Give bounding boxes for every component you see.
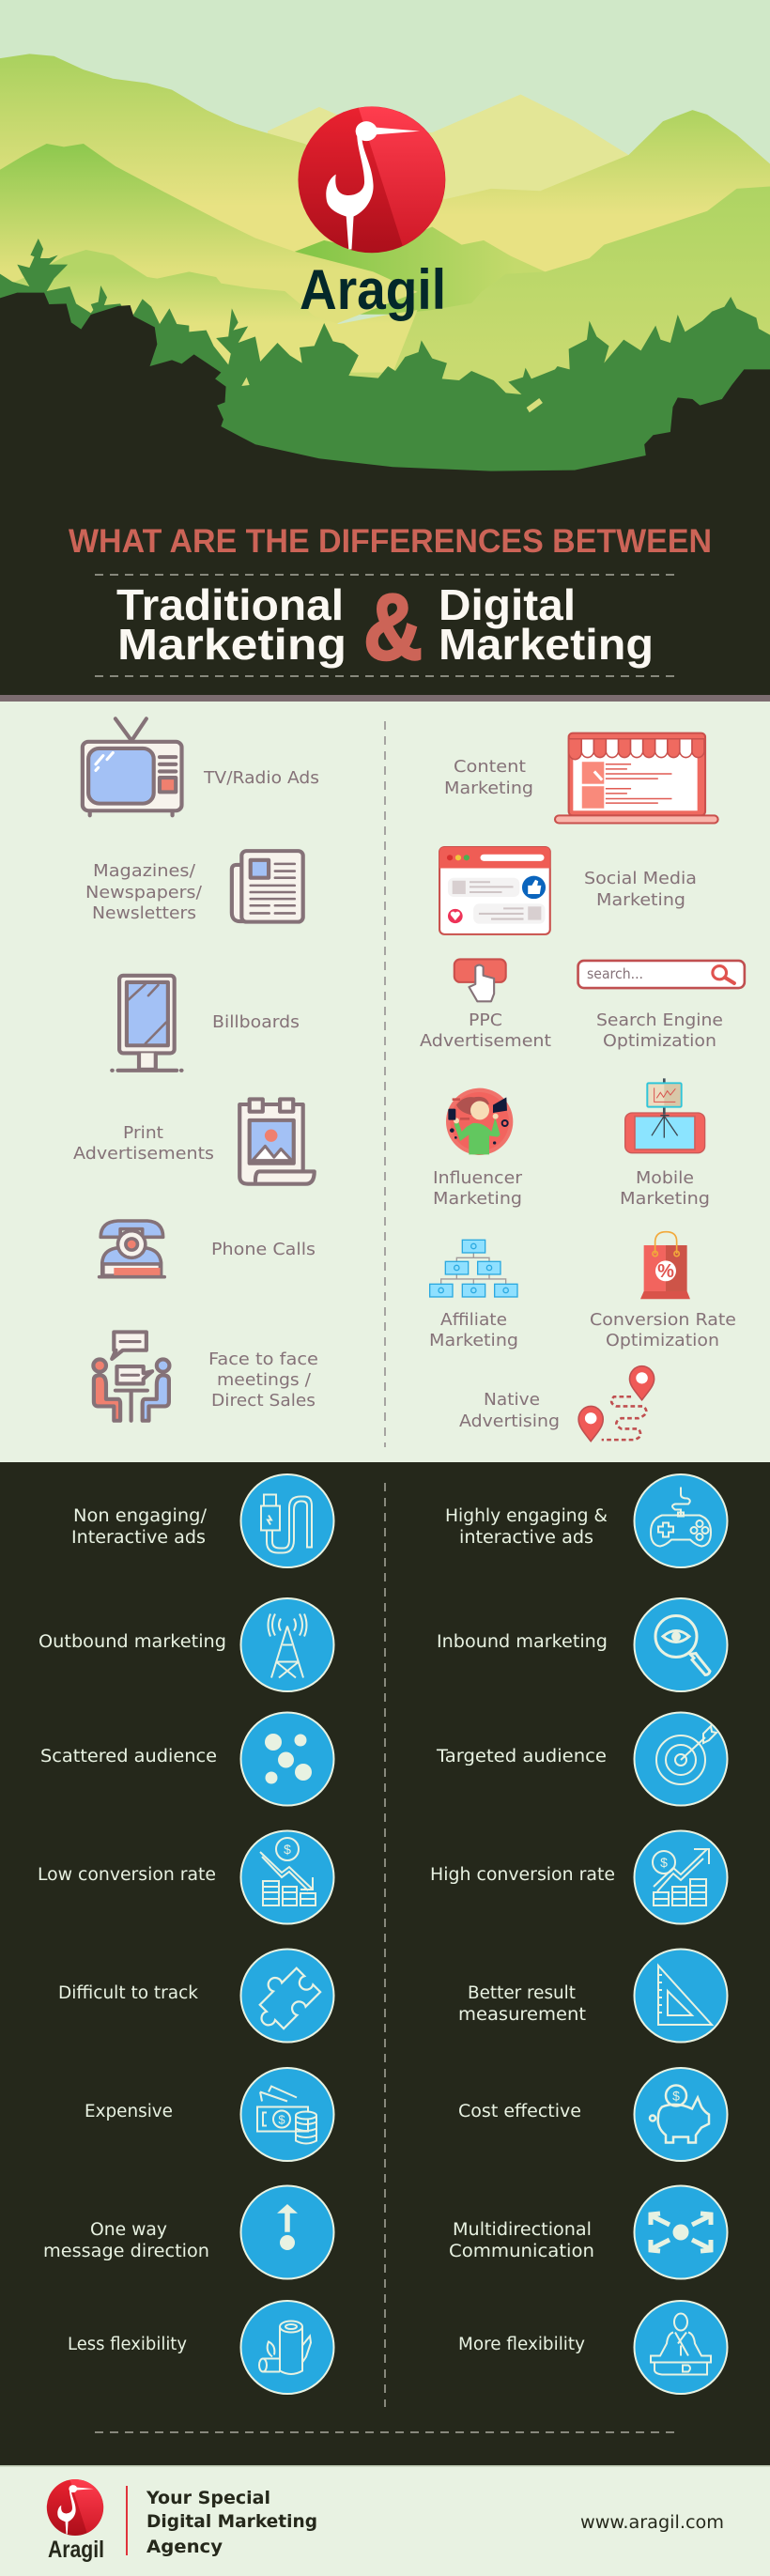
label: More flexibility bbox=[458, 2335, 585, 2354]
label: Advertising bbox=[459, 1412, 560, 1431]
icon: print poster bbox=[239, 1099, 315, 1184]
icon: meeting bbox=[93, 1332, 169, 1421]
icon: antenna tower bbox=[240, 1598, 334, 1691]
icon: click button bbox=[454, 959, 506, 1001]
label bbox=[449, 2220, 594, 2261]
label: Communication bbox=[449, 2242, 594, 2261]
panel: comparison bbox=[0, 1462, 770, 2465]
label: measurement bbox=[458, 2005, 586, 2025]
item: Magazines bbox=[85, 851, 303, 923]
icon: rotary phone bbox=[100, 1221, 164, 1277]
footer wordmark: Aragil bbox=[48, 2537, 104, 2563]
icon: map pins and route bbox=[578, 1366, 654, 1442]
label bbox=[433, 1169, 523, 1209]
label bbox=[85, 862, 202, 923]
label: Optimization bbox=[606, 1332, 719, 1350]
heading: what are the differences: WHAT ARE THE DIFFERENCES BETWEEN bbox=[69, 523, 712, 560]
header landscape bbox=[0, 0, 770, 563]
label: Marketing bbox=[433, 1190, 522, 1209]
label: Advertisements bbox=[73, 1145, 214, 1164]
title: traditional marketing and digital marketing: Traditional bbox=[116, 580, 344, 629]
icon: multidirectional arrows bbox=[635, 2186, 727, 2278]
label: Phone Calls bbox=[211, 1241, 316, 1259]
website: www.aragil.com bbox=[580, 2513, 724, 2533]
label: Scattered audience bbox=[40, 1747, 217, 1766]
label: Less flexibility bbox=[68, 2335, 187, 2354]
item: Content Marketing bbox=[444, 733, 718, 824]
label: Outbound marketing bbox=[38, 1632, 226, 1652]
label: Billboards bbox=[212, 1013, 300, 1032]
label bbox=[429, 1311, 518, 1350]
label: Conversion Rate bbox=[590, 1311, 736, 1330]
label: Magazines/ bbox=[93, 862, 195, 881]
item: Affiliate Marketing bbox=[429, 1240, 518, 1350]
label: Newspapers/ bbox=[85, 884, 202, 902]
label: Marketing bbox=[429, 1332, 518, 1350]
icon: rising money chart bbox=[635, 1831, 727, 1923]
icon: cash and coins bbox=[240, 2068, 334, 2161]
search placeholder: search... bbox=[587, 965, 643, 982]
label: Native bbox=[484, 1391, 540, 1410]
icon: television bbox=[83, 718, 182, 815]
label: Direct Sales bbox=[211, 1392, 316, 1411]
icon: logs bbox=[240, 2301, 334, 2394]
label: message direction bbox=[43, 2242, 209, 2261]
label: Low conversion rate bbox=[38, 1865, 216, 1885]
label: TV/Radio Ads bbox=[203, 769, 319, 788]
icon: falling money chart bbox=[240, 1831, 334, 1923]
icon: scattered dots bbox=[240, 1713, 334, 1805]
label: Inbound marketing bbox=[437, 1632, 608, 1652]
label: interactive ads bbox=[459, 1528, 593, 1548]
row: one way vs multidirectional bbox=[43, 2186, 727, 2278]
item: Mobile Marketing bbox=[620, 1078, 710, 1209]
label: Interactive ads bbox=[71, 1528, 206, 1548]
percent sign: % bbox=[657, 1261, 674, 1282]
icon: shopping bag bbox=[640, 1232, 690, 1299]
title: traditional marketing and digital marketing bbox=[116, 575, 654, 680]
item: Billboards bbox=[112, 976, 300, 1071]
title: traditional marketing and digital marketing: Digital bbox=[439, 580, 576, 629]
label bbox=[444, 758, 533, 798]
footer logo bbox=[47, 2479, 103, 2536]
label: Search Engine bbox=[596, 1011, 723, 1030]
icon: meditating person bbox=[635, 2301, 727, 2394]
item: Phone Calls bbox=[100, 1221, 316, 1277]
icon: billboard bbox=[112, 976, 182, 1071]
icon: piggy bank: $ bbox=[672, 2089, 680, 2104]
label: Targeted audience bbox=[436, 1747, 607, 1766]
icon: laptop storefront bbox=[555, 733, 718, 824]
label bbox=[208, 1350, 318, 1411]
row: low vs high conversion bbox=[38, 1831, 727, 1923]
icon: influencer bbox=[446, 1088, 513, 1155]
icon: cable bbox=[240, 1474, 334, 1567]
icon: falling money chart: $ bbox=[284, 1842, 291, 1857]
icon: search box bbox=[578, 961, 745, 988]
label: One way bbox=[90, 2220, 167, 2240]
label: Better result bbox=[468, 1983, 576, 2003]
label: High conversion rate bbox=[430, 1865, 615, 1885]
icon: newspaper bbox=[232, 851, 303, 922]
label: Marketing bbox=[444, 779, 533, 798]
item: Social Media Marketing bbox=[439, 847, 697, 934]
label: Influencer bbox=[433, 1169, 523, 1188]
label: Affiliate bbox=[440, 1311, 507, 1330]
label bbox=[420, 1011, 551, 1051]
label: PPC bbox=[469, 1011, 502, 1030]
row: non engaging vs highly engaging bbox=[71, 1474, 727, 1567]
divider stripe bbox=[0, 695, 770, 702]
icon: puzzle piece bbox=[240, 1950, 334, 2042]
label bbox=[73, 1124, 214, 1164]
label: Highly engaging & bbox=[445, 1506, 608, 1526]
icon: cash and coins: $ bbox=[278, 2113, 285, 2126]
icon: piggy bank bbox=[635, 2068, 727, 2161]
tagline: Digital Marketing bbox=[146, 2511, 317, 2532]
icon: money hierarchy bbox=[430, 1240, 517, 1297]
row: outbound vs inbound bbox=[38, 1598, 727, 1691]
title: traditional marketing and digital marketing: Marketing bbox=[439, 620, 654, 669]
icon: target with arrow bbox=[635, 1713, 727, 1805]
item: Native Advertising bbox=[459, 1366, 654, 1442]
label bbox=[620, 1169, 710, 1209]
row: expensive vs cost effective bbox=[85, 2068, 727, 2161]
icon: social window bbox=[439, 847, 550, 934]
item: PPC Advertisement bbox=[420, 959, 551, 1051]
label: Optimization bbox=[603, 1032, 716, 1051]
icon: game controller bbox=[635, 1474, 727, 1567]
item: Face to face meetings bbox=[93, 1332, 318, 1421]
logo wordmark: Aragil bbox=[300, 258, 446, 321]
icon: one way arrow bbox=[240, 2186, 334, 2278]
label: Advertisement bbox=[420, 1032, 551, 1051]
item: Print Advertisements bbox=[73, 1099, 315, 1184]
panel: channels bbox=[0, 702, 770, 1462]
label: Marketing bbox=[596, 891, 685, 910]
label: Print bbox=[123, 1124, 163, 1143]
label bbox=[445, 1506, 608, 1548]
icon: magnifier with eye bbox=[635, 1598, 727, 1691]
item: Conversion Rate Optimization bbox=[590, 1232, 736, 1350]
label: Mobile bbox=[636, 1169, 694, 1188]
label: Non engaging/ bbox=[73, 1506, 208, 1526]
logo: crane in red circle bbox=[298, 106, 445, 253]
row: scattered vs targeted bbox=[40, 1713, 727, 1805]
icon: set square bbox=[635, 1950, 727, 2042]
label bbox=[590, 1311, 736, 1350]
label: Social Media bbox=[584, 870, 697, 888]
label: Newsletters bbox=[92, 904, 196, 923]
label: Face to face bbox=[208, 1350, 318, 1369]
item: Search Engine Optimization bbox=[578, 961, 745, 1051]
footer bbox=[0, 2465, 770, 2576]
tagline bbox=[146, 2488, 317, 2557]
label bbox=[43, 2220, 209, 2261]
item: TV/Radio Ads bbox=[83, 718, 319, 815]
label: Cost effective bbox=[458, 2102, 581, 2121]
icon: rising money chart: $ bbox=[660, 1855, 668, 1870]
label bbox=[584, 870, 697, 910]
label: meetings / bbox=[217, 1371, 311, 1390]
label bbox=[459, 1391, 560, 1431]
row: tracking vs measurement bbox=[58, 1950, 727, 2042]
title: traditional marketing and digital marketing: Marketing bbox=[117, 620, 346, 669]
item: Influencer Marketing bbox=[433, 1088, 523, 1209]
label bbox=[458, 1983, 586, 2025]
label: Marketing bbox=[620, 1190, 710, 1209]
row: less vs more flexibility bbox=[68, 2301, 727, 2394]
dark title band bbox=[0, 493, 770, 695]
title: traditional marketing and digital marketing: & bbox=[363, 575, 423, 680]
label: Multidirectional bbox=[453, 2220, 592, 2240]
tagline: Your Special bbox=[146, 2488, 270, 2508]
tagline: Agency bbox=[146, 2537, 223, 2557]
label bbox=[71, 1506, 208, 1548]
label: Difficult to track bbox=[58, 1983, 198, 2003]
label: Expensive bbox=[85, 2102, 173, 2121]
label: Content bbox=[454, 758, 526, 777]
label bbox=[596, 1011, 723, 1051]
icon: phone with chart bbox=[625, 1078, 705, 1153]
